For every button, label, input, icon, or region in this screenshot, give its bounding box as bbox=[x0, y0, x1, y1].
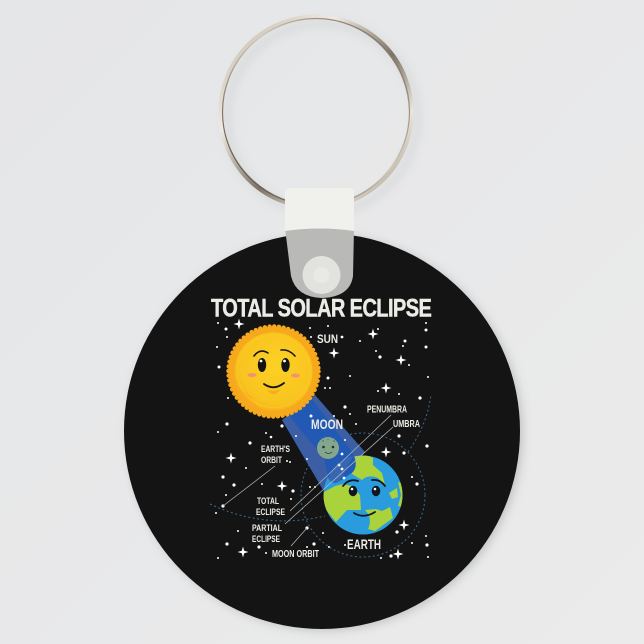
label: partial eclipse: ECLIPSE bbox=[252, 534, 280, 545]
penumbra shadow beam bbox=[282, 395, 365, 490]
leader lines bbox=[223, 415, 393, 546]
label: total eclipse: ECLIPSE bbox=[256, 507, 285, 518]
label: earth's orbit: EARTH'S bbox=[261, 444, 290, 455]
penumbra overlap on earth bbox=[328, 456, 353, 482]
plastic clasp bbox=[285, 188, 354, 298]
label: sun: SUN bbox=[317, 332, 338, 346]
label: moon: MOON bbox=[311, 417, 343, 432]
label: penumbra: PENUMBRA bbox=[367, 404, 407, 416]
label: total eclipse: TOTAL bbox=[257, 496, 279, 507]
label: partial eclipse: PARTIAL bbox=[252, 523, 282, 534]
label: earth's orbit: ORBIT bbox=[261, 455, 282, 466]
label: earth: EARTH bbox=[347, 536, 381, 552]
black badge bbox=[124, 233, 520, 629]
title: TOTAL SOLAR ECLIPSE bbox=[211, 294, 432, 322]
shadow stars over the beam bbox=[280, 414, 346, 479]
label: moon orbit: MOON ORBIT bbox=[272, 549, 319, 560]
metal key ring bbox=[221, 17, 411, 207]
umbra shadow beam bbox=[290, 399, 356, 483]
sun bbox=[228, 326, 318, 416]
badge shadow bbox=[128, 236, 522, 630]
moon bbox=[317, 437, 339, 459]
earth bbox=[322, 455, 405, 534]
ring shadow bbox=[227, 23, 417, 213]
starfield bbox=[215, 318, 429, 560]
label: umbra: UMBRA bbox=[393, 419, 420, 430]
orbit paths bbox=[210, 395, 431, 557]
